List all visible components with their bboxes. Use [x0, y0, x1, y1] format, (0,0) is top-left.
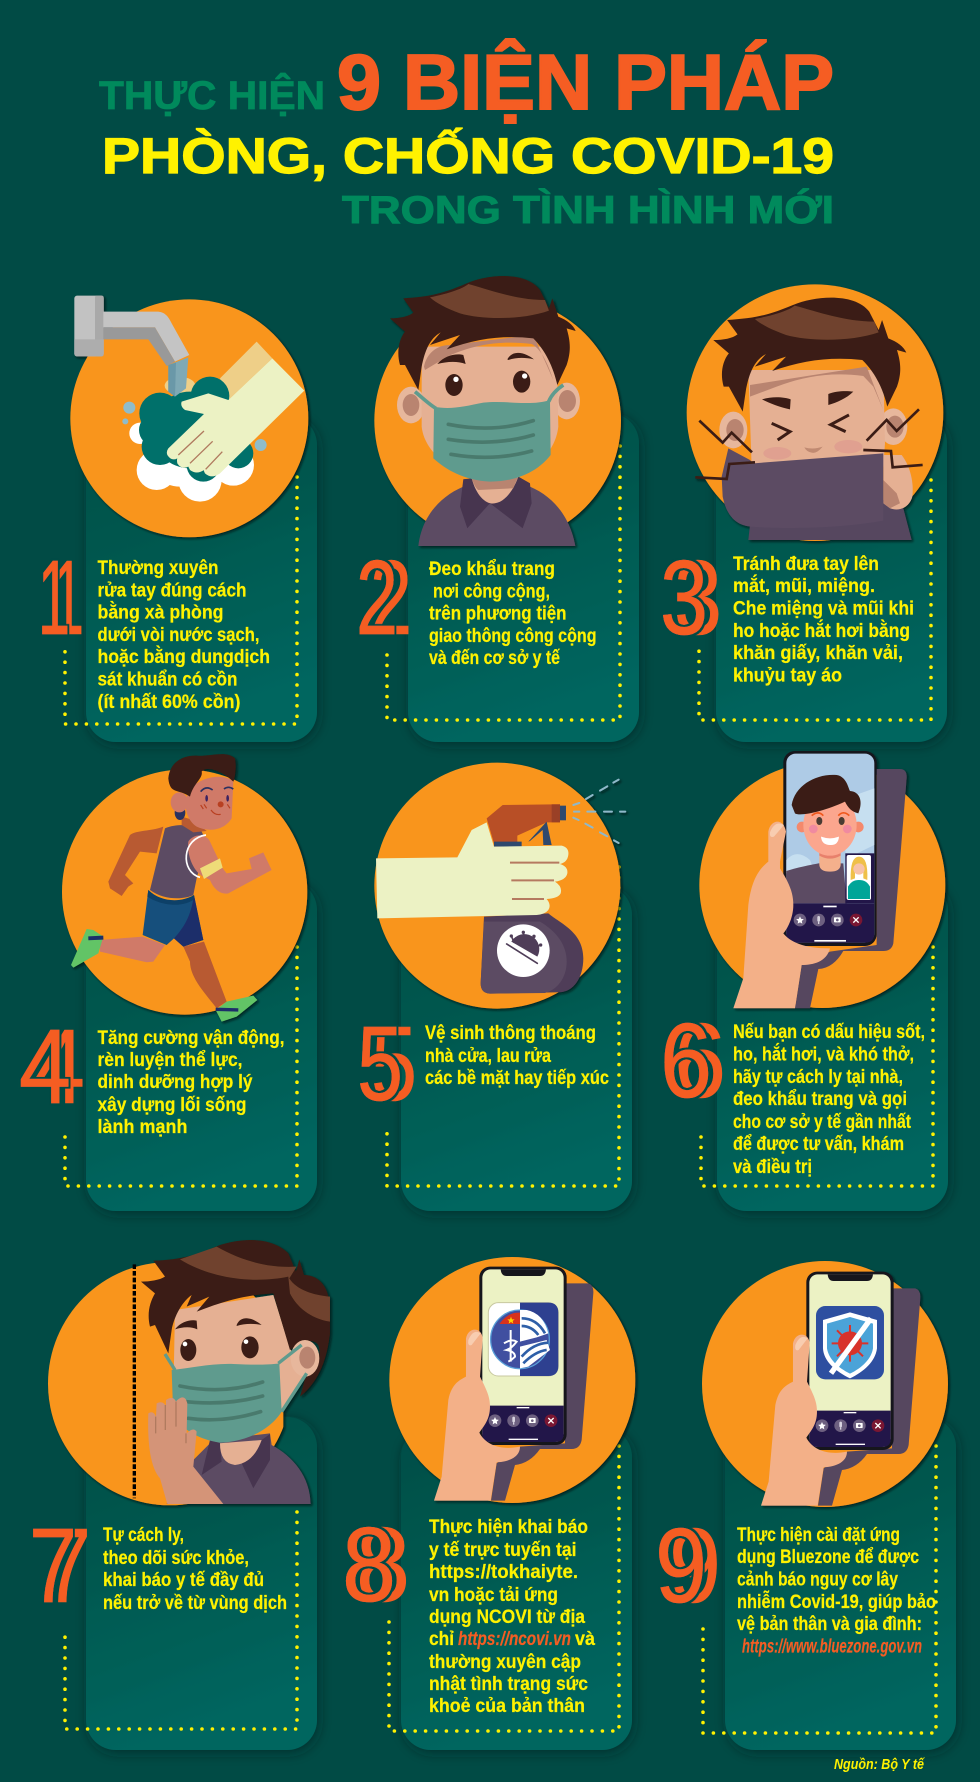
text: step 3: khuỷu tay áo: [733, 665, 842, 686]
panel: step 2 wearing mask: [356, 276, 639, 742]
icon: gloved hand with spray bottle: [374, 763, 625, 1009]
text: step 6: để được tư vấn, khám: [733, 1134, 904, 1155]
text: step 8: chỉ: [429, 1629, 454, 1650]
text: step 1: sát khuẩn có cồn: [98, 670, 238, 690]
text: step 8: thường xuyên cập: [429, 1652, 581, 1673]
text: step 2: Đeo khẩu trang: [429, 559, 555, 580]
text: step 9: vệ bản thân và gia đình:: [737, 1614, 922, 1635]
panel: step 4 exercise: [19, 754, 317, 1211]
text: step 3: mắt, mũi, miệng.: [733, 575, 875, 597]
icon: man with mask behind isolation line: [48, 1240, 330, 1505]
text: step 7: nếu trở về từ vùng dịch: [103, 1593, 287, 1614]
card 6: [717, 880, 948, 1211]
icon: hand holding phone with NCOVI logo: [389, 1257, 635, 1503]
text: step 1: hoặc bằng dungdịch: [98, 646, 270, 668]
panel: step 6 video call: [660, 751, 948, 1211]
icon: runner: [62, 754, 307, 1022]
text: step 4: [98, 1028, 284, 1138]
text: step 2: giao thông công cộng: [429, 626, 596, 647]
text: step 4: lành mạnh: [98, 1117, 188, 1138]
title: PHÒNG, CHỐNG COVID-19: [102, 127, 834, 184]
text: step 3: khăn giấy, khăn vải,: [733, 643, 903, 664]
text: step 1: rửa tay đúng cách: [98, 580, 246, 601]
text: step 6: đeo khẩu trang và gọi: [733, 1089, 907, 1110]
number 6: 6: [660, 1002, 712, 1120]
number 7: 7: [29, 1507, 77, 1625]
text: step 6: ho, hắt hơi, và khó thở,: [733, 1044, 914, 1066]
number 3: 3: [660, 539, 708, 657]
text: step 5: [425, 1023, 609, 1089]
text: step 9: nhiễm Covid-19, giúp bảo: [737, 1591, 936, 1613]
text: step 3: [733, 554, 914, 686]
text: step 6: và điều trị: [733, 1157, 812, 1178]
icon: man coughing into elbow: [687, 284, 943, 541]
text: step 5: Vệ sinh thông thoáng: [425, 1023, 596, 1044]
text: step 2: và đến cơ sở y tế: [429, 648, 560, 669]
card 1: [86, 415, 317, 742]
title: THỰC HIỆN: [99, 72, 325, 118]
text: step 7: [103, 1525, 287, 1614]
card 5: [401, 885, 632, 1211]
icon: hand holding phone with video call: [699, 751, 945, 1008]
card 9: [725, 1417, 956, 1750]
panel: step 3 covering cough: [660, 284, 947, 742]
text: step 6: hãy tự cách ly tại nhà,: [733, 1067, 903, 1088]
text: step 2: [429, 559, 596, 669]
text: step 9: cảnh báo nguy cơ lây: [737, 1570, 898, 1590]
card 4: [86, 880, 317, 1211]
card 8: [401, 1427, 632, 1750]
text: step 6: [733, 1022, 925, 1178]
panel: step 7 self isolation: [29, 1240, 330, 1750]
card 7: [86, 1417, 317, 1750]
text: step 5: nhà cửa, lau rửa: [425, 1046, 551, 1067]
number 8: 8: [342, 1506, 396, 1624]
number 9: 9: [655, 1507, 707, 1625]
text: step 8: khoẻ của bản thân: [429, 1696, 585, 1717]
number 5: 5: [357, 1005, 403, 1123]
title: [99, 38, 834, 232]
text: step 2: nơi công cộng,: [433, 581, 550, 602]
card 2: [408, 413, 639, 742]
text: step 1: bằng xà phòng: [98, 602, 224, 624]
text: step 8: https://ncovi.vn: [458, 1629, 571, 1650]
text: step 8: và: [575, 1629, 595, 1650]
text: step 3: Tránh đưa tay lên: [733, 554, 879, 575]
text: step 4: rèn luyện thể lực,: [98, 1050, 242, 1071]
text: step 1: Thường xuyên: [98, 558, 218, 579]
icon: man wearing mask: [374, 276, 621, 546]
text: step 8: y tế trực tuyến tại: [429, 1540, 576, 1561]
card 3: [716, 413, 947, 742]
text: step 2: trên phương tiện: [429, 604, 566, 625]
text: step 7: theo dõi sức khỏe,: [103, 1548, 249, 1569]
panel: step 9 Bluezone app: [655, 1261, 956, 1750]
text: step 8: dụng NCOVI từ địa: [429, 1607, 585, 1628]
text: step 9: Thực hiện cài đặt ứng: [737, 1525, 900, 1546]
title: 9 BIỆN PHÁP: [337, 38, 834, 126]
text: step 4: Tăng cường vận động,: [98, 1028, 284, 1049]
text: step 8: nhật tình trạng sức: [429, 1674, 588, 1695]
icon: hand holding phone with Bluezone logo: [702, 1261, 948, 1507]
panel: step 8 online health declaration: [342, 1257, 635, 1750]
text: step 8: [429, 1517, 595, 1717]
text: step 4: dinh dưỡng hợp lý: [98, 1072, 253, 1093]
source credit: Nguồn: Bộ Y tế: [834, 1756, 925, 1773]
panel: step 5 disinfecting: [357, 763, 632, 1211]
panel: step 1 hand washing: [38, 296, 317, 742]
text: step 3: ho hoặc hắt hơi bằng: [733, 620, 910, 642]
text: step 9: [737, 1525, 936, 1658]
icon: washing hands under tap: [70, 296, 308, 537]
text: step 8: https://tokhaiyte.: [429, 1562, 578, 1583]
text: step 7: khai báo y tế đầy đủ: [103, 1570, 264, 1591]
number 1: 1: [38, 539, 70, 657]
text: step 1: [98, 558, 270, 713]
text: step 8: vn hoặc tải ứng: [429, 1585, 558, 1606]
text: step 7: Tự cách ly,: [103, 1525, 184, 1546]
text: step 4: xây dựng lối sống: [98, 1095, 246, 1116]
text: step 3: Che miệng và mũi khi: [733, 598, 914, 619]
text: step 1: (ít nhất 60% cồn): [98, 692, 240, 713]
number 2: 2: [356, 539, 398, 657]
text: step 9: dụng Bluezone để được: [737, 1547, 919, 1568]
text: step 6: Nếu bạn có dấu hiệu sốt,: [733, 1022, 925, 1043]
text: step 8: Thực hiện khai báo: [429, 1517, 588, 1538]
text: step 6: cho cơ sở y tế gần nhất: [733, 1112, 912, 1133]
title: TRONG TÌNH HÌNH MỚI: [342, 188, 834, 232]
number 4: 4: [19, 1008, 71, 1126]
text: step 5: các bề mặt hay tiếp xúc: [425, 1068, 609, 1089]
text: step 1: dưới vòi nước sạch,: [98, 625, 260, 646]
